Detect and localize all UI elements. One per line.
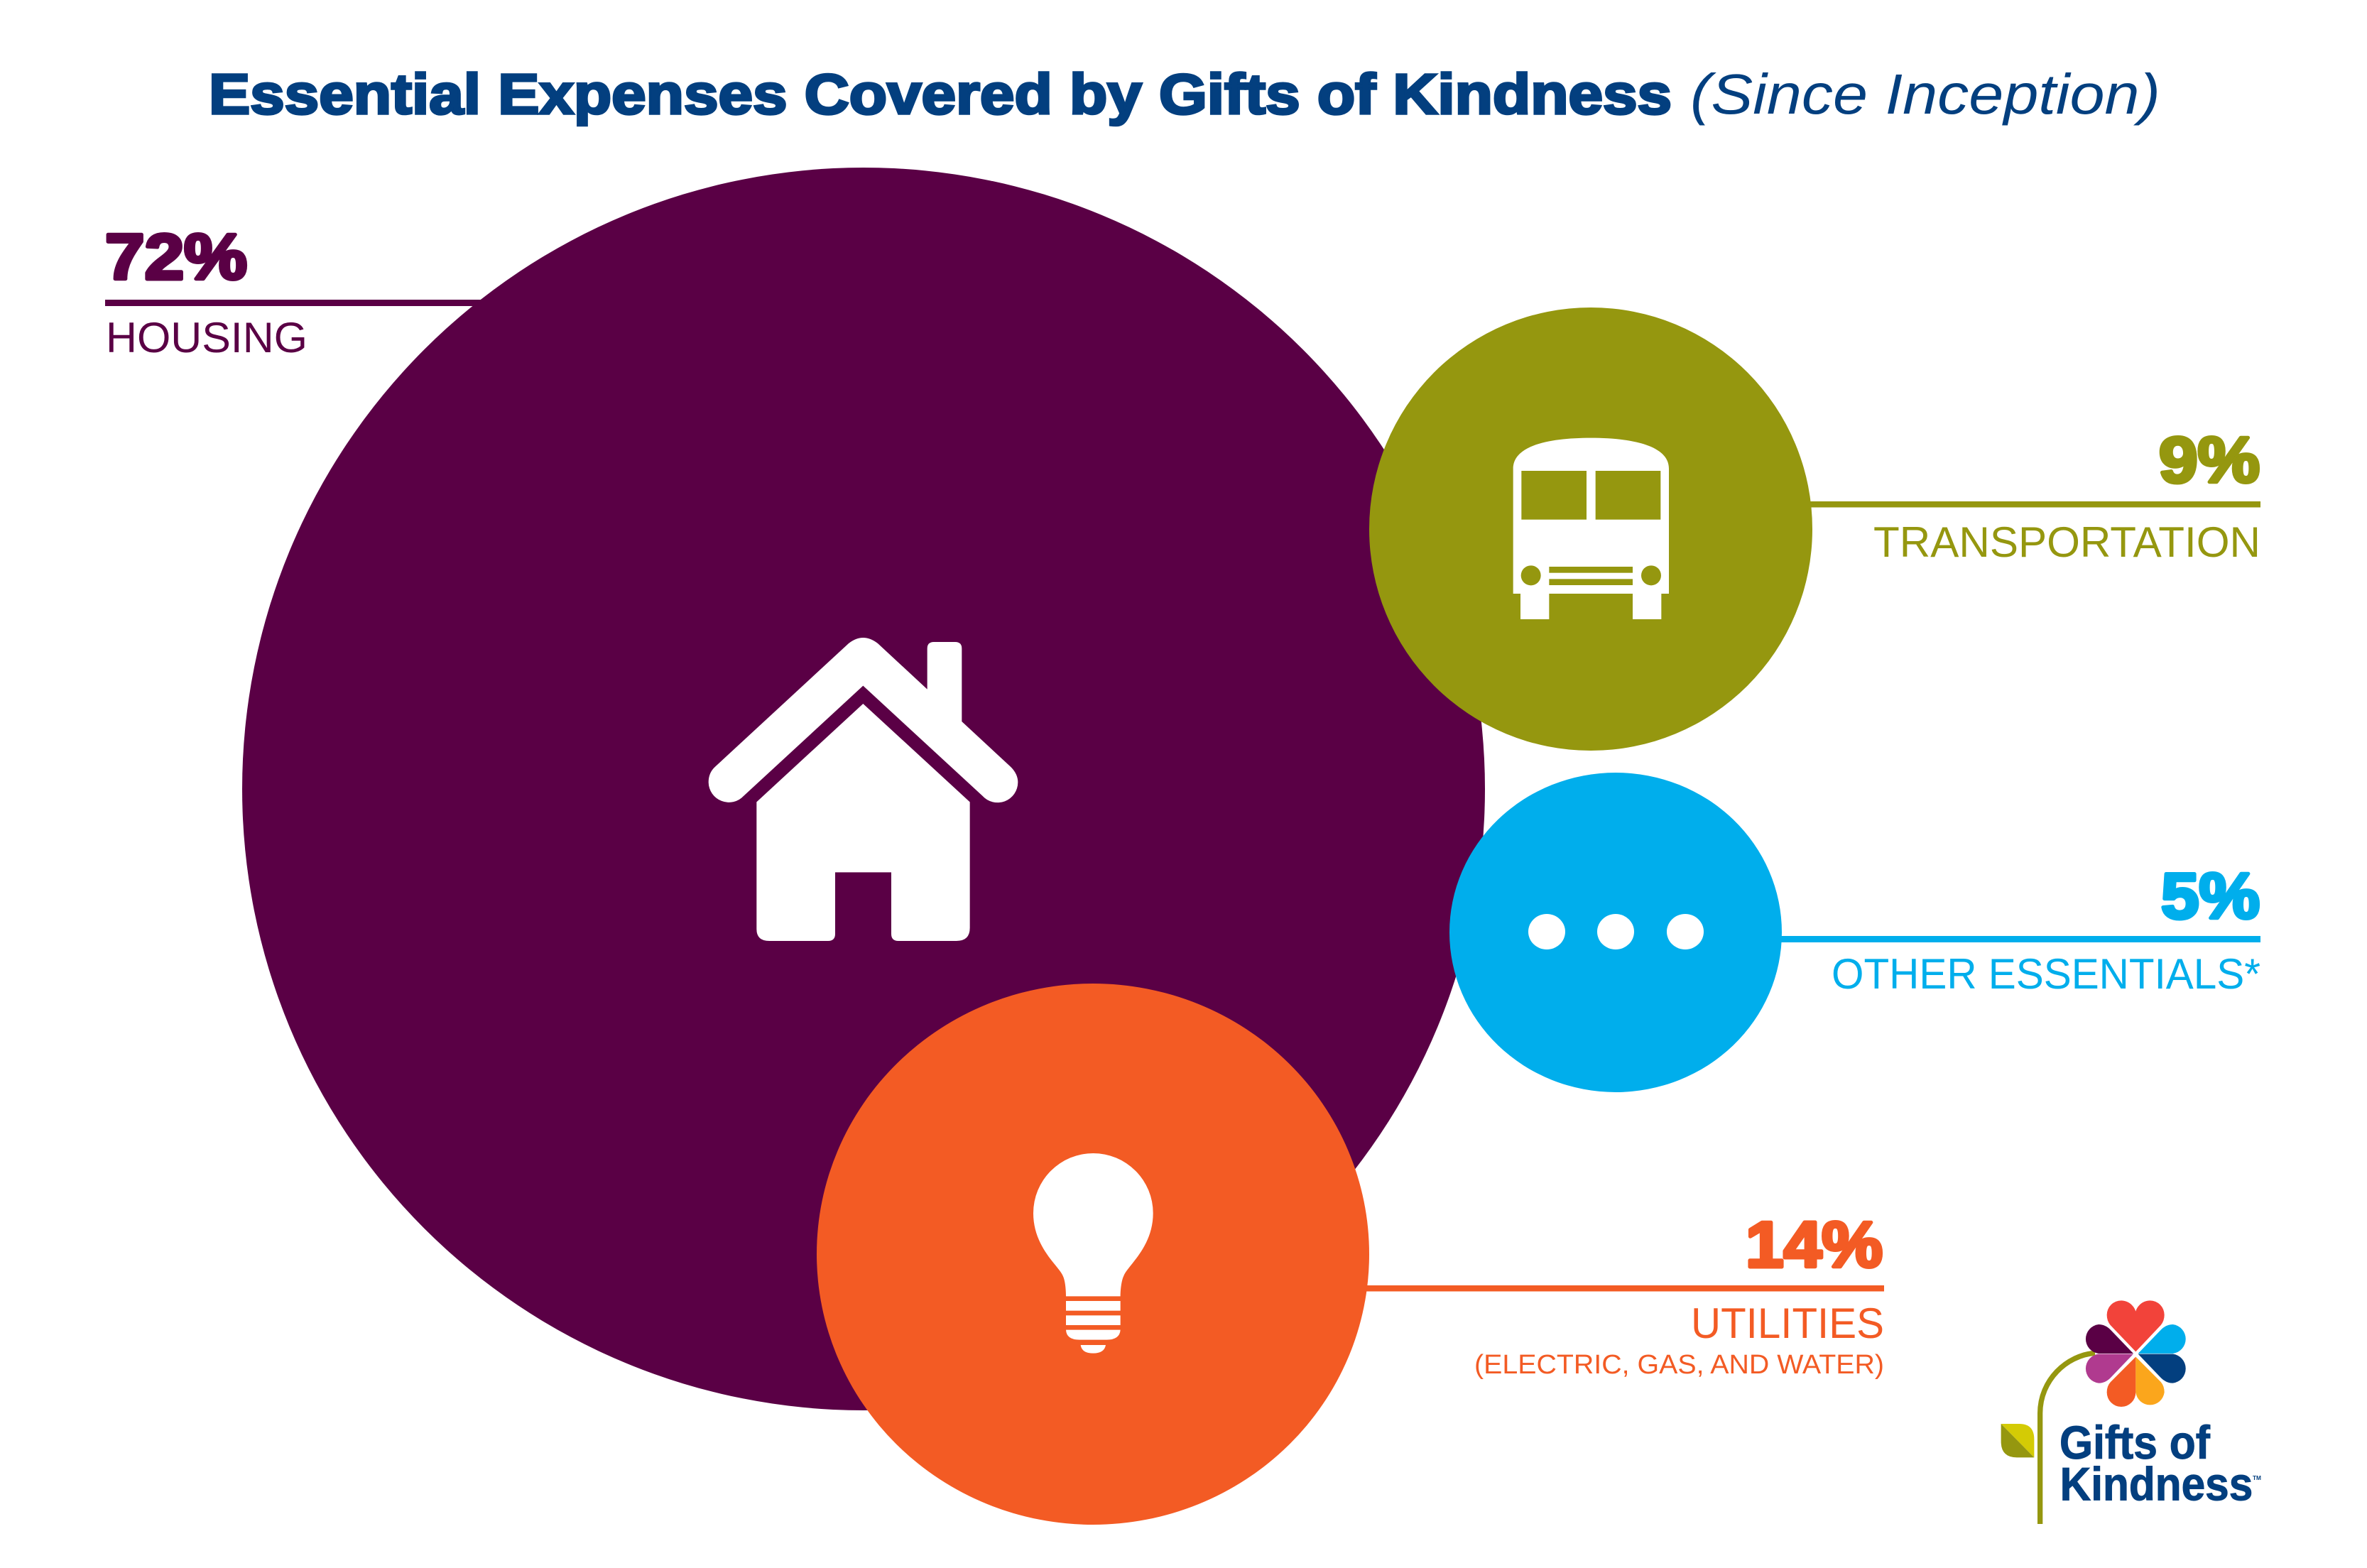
logo wordmark: Kindness [2060,1458,2253,1510]
logo wordmark: Gifts of [2059,1416,2211,1469]
icon: light bulb [1033,1153,1153,1354]
other essentials percentage: 5% [2161,861,2260,932]
housing circle [242,168,1485,1410]
other essentials circle [1449,773,1782,1092]
logo stem [2040,1353,2095,1524]
transportation percentage: 9% [2159,425,2260,496]
housing percentage: 72% [105,222,247,293]
utilities circle [817,984,1369,1525]
panel: housing 72% [105,168,1485,1410]
panel: transportation 9% [1369,307,2260,751]
panel: other essentials 5% [1449,773,2260,1092]
transportation label: TRANSPORTATION [1873,518,2260,566]
utilities label: UTILITIES [1691,1300,1884,1347]
logo: Gifts of Kindness [2001,1300,2261,1524]
logo leaf [2001,1424,2034,1457]
housing leader line [105,300,503,306]
icon: house [709,638,1018,941]
title [209,62,2160,126]
title: Essential Expenses Covered by Gifts of Kindness [209,62,1672,126]
other essentials leader line [1775,936,2260,942]
utilities sublabel: (ELECTRIC, GAS, AND WATER) [1474,1350,1884,1380]
transportation leader line [1804,501,2260,507]
utilities percentage: 14% [1746,1209,1883,1281]
icon: three dots [1528,914,1704,949]
panel: utilities 14% [817,984,1884,1525]
logo wordmark: TM [2253,1475,2261,1481]
other essentials label: OTHER ESSENTIALS* [1832,950,2260,998]
logo flower [2086,1300,2186,1407]
housing label: HOUSING [106,314,308,361]
title: (Since Inception) [1690,62,2160,126]
transportation circle [1369,307,1812,751]
utilities leader line [1349,1285,1884,1291]
logo wordmark [2059,1416,2261,1510]
icon: bus [1513,438,1669,619]
